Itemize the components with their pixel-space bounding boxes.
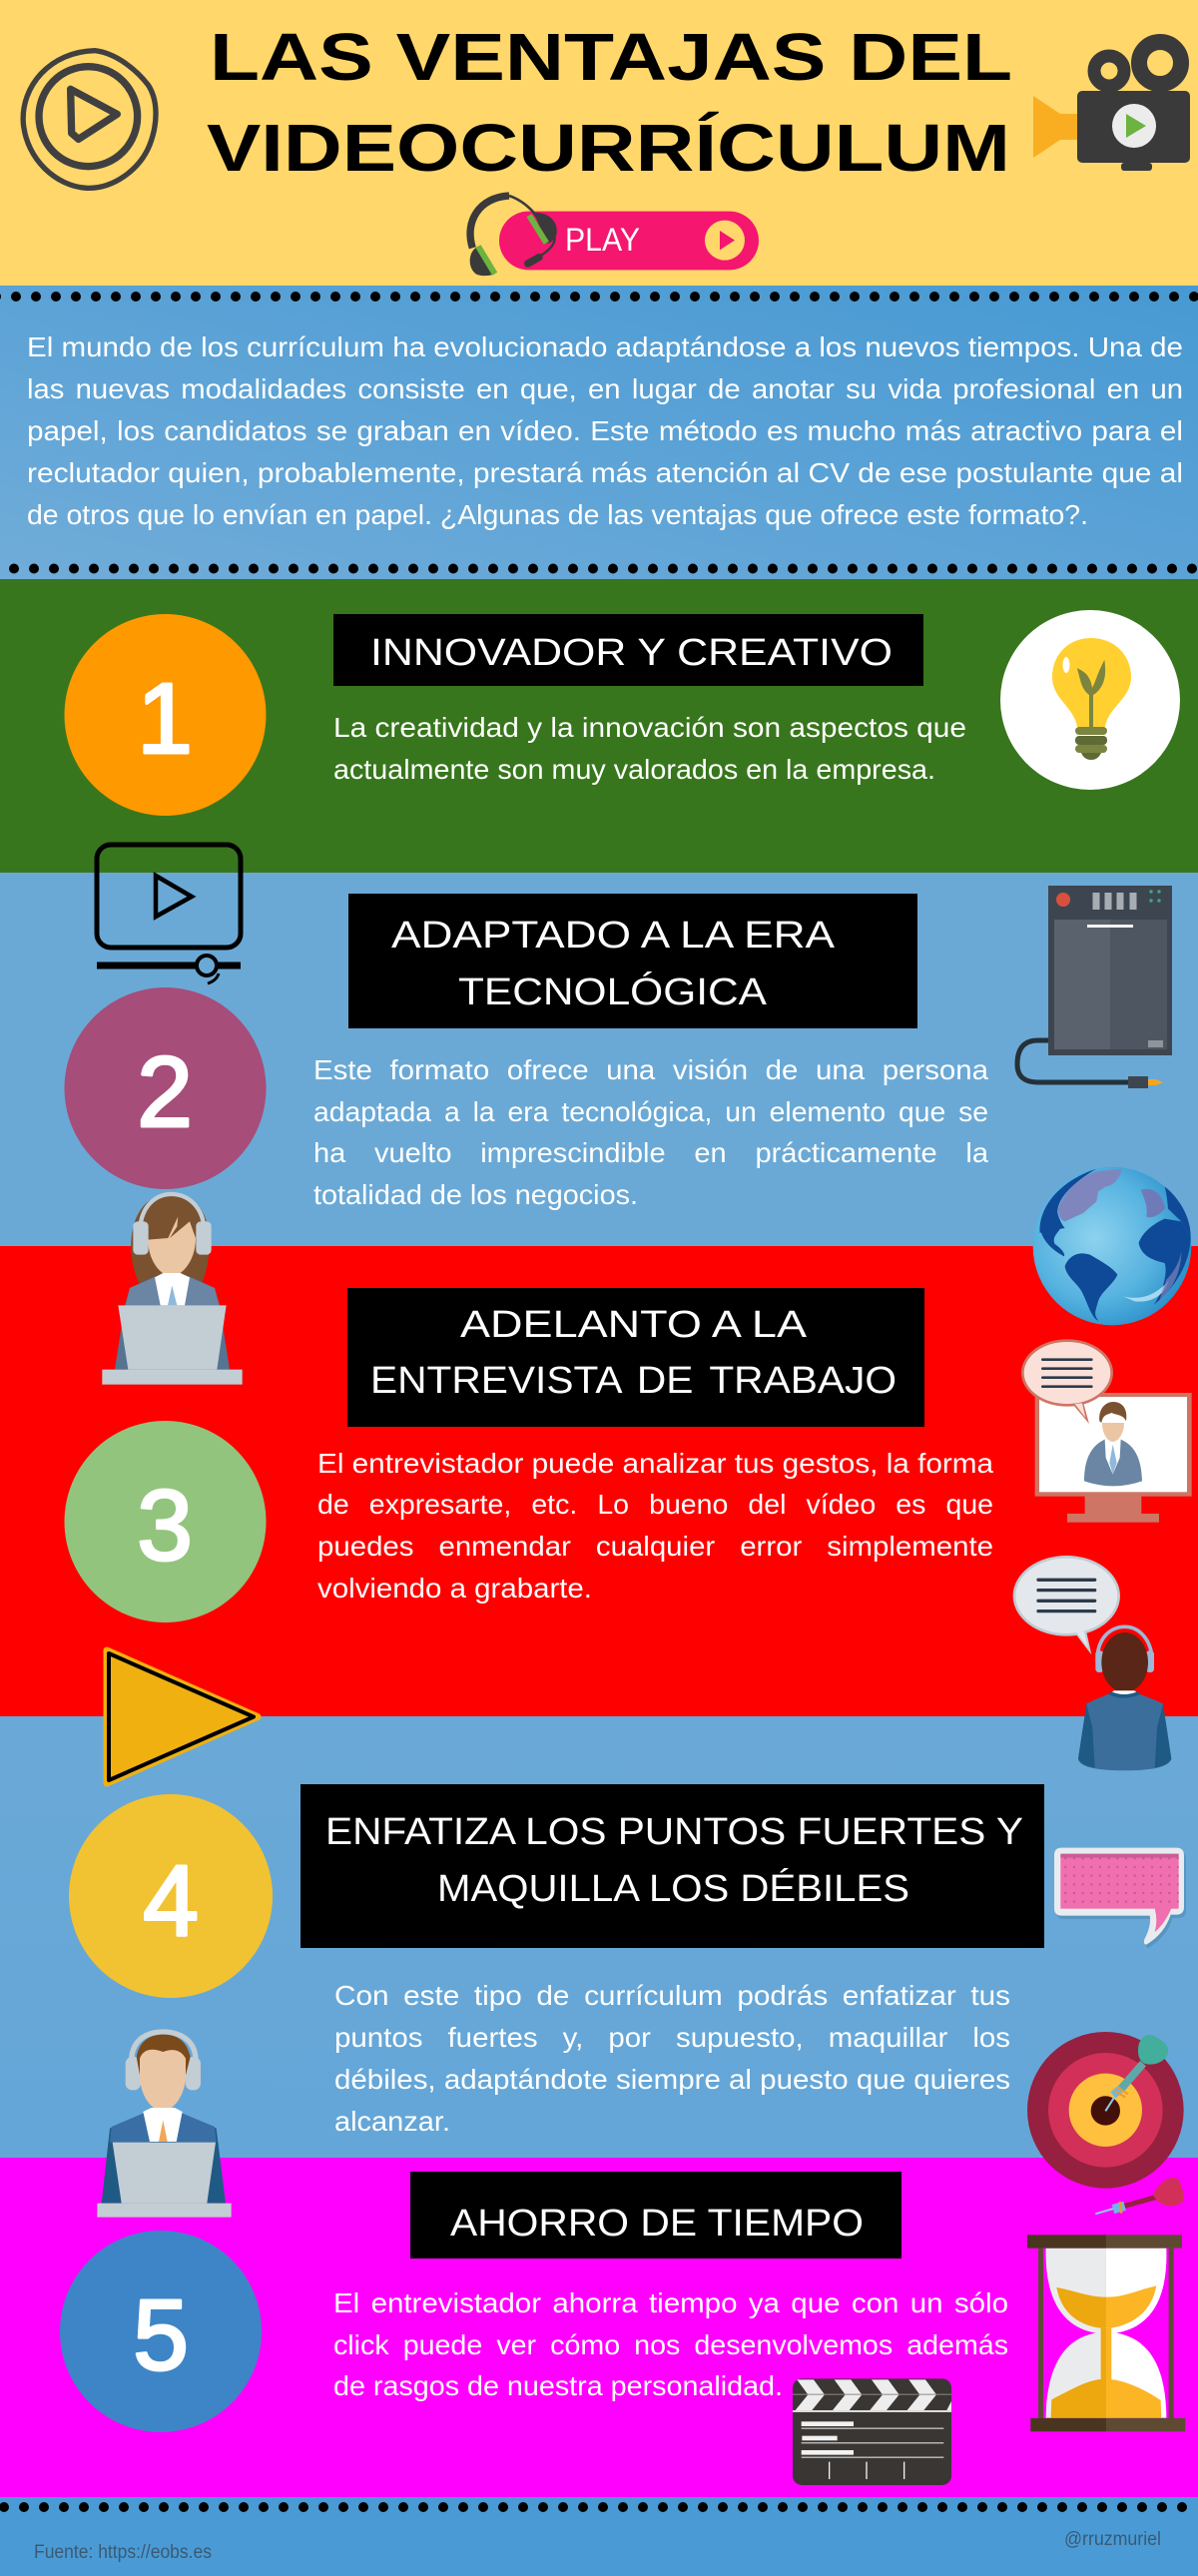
icon: play logo bbox=[23, 51, 156, 188]
icon: interviewer from behind bbox=[1014, 1557, 1171, 1770]
icon: clapperboard bbox=[793, 2378, 951, 2485]
text 3: volviendo a grabarte. bbox=[317, 1573, 592, 1604]
heading 4 bbox=[300, 1784, 1044, 1948]
text 3: de expresarte, etc. Lo bueno del vídeo es que bbox=[317, 1489, 993, 1520]
text 2: adaptada a la era tecnológica, un elemento que se bbox=[313, 1096, 988, 1127]
text 2: totalidad de los negocios. bbox=[313, 1179, 638, 1210]
title: LAS VENTAJAS DEL bbox=[210, 20, 1012, 95]
icon: man with headset bbox=[97, 2032, 232, 2218]
text 5: El entrevistador ahorra tiempo ya que con un sólo bbox=[333, 2287, 1008, 2318]
play button icon bbox=[705, 221, 745, 261]
text 4: Con este tipo de currículum podrás enfatizar tus bbox=[334, 1980, 1010, 2011]
icon: headset bbox=[470, 196, 557, 276]
text 1: actualmente son muy valorados en la empresa. bbox=[333, 754, 935, 785]
icon: hourglass bbox=[1027, 2235, 1185, 2431]
heading 3 bbox=[347, 1288, 924, 1427]
heading 1 bbox=[333, 614, 923, 686]
heading 2 bbox=[348, 894, 917, 1028]
icon: video camera bbox=[1033, 42, 1190, 171]
icon: video player outline bbox=[97, 845, 241, 983]
text 3: puedes enmendar cualquier error simplemente bbox=[317, 1531, 993, 1562]
number 1: 1 bbox=[137, 663, 193, 775]
band: section 4 bbox=[0, 1716, 1198, 2158]
heading 4: MAQUILLA LOS DÉBILES bbox=[437, 1867, 909, 1910]
intro text: de otros que lo envían en papel. ¿Algunas de las ventajas que ofrece este formato?. bbox=[27, 499, 1088, 530]
text 4: débiles, adaptándote siempre al puesto que quieres bbox=[334, 2064, 1010, 2095]
text 2: Este formato ofrece una visión de una persona bbox=[313, 1054, 988, 1085]
icon: target with darts bbox=[1027, 2032, 1184, 2214]
text 2 bbox=[313, 1054, 988, 1210]
panel: section 2 bbox=[64, 894, 988, 1210]
heading 3: ENTREVISTA DE TRABAJO bbox=[370, 1360, 897, 1402]
footer background bbox=[0, 2497, 1198, 2576]
band: section 2 bbox=[0, 873, 1198, 1246]
intro text: reclutador quien, probablemente, prestará más atención al CV de ese postulante que al bbox=[27, 457, 1183, 488]
play label: PLAY bbox=[565, 222, 640, 258]
panel: section 4 bbox=[69, 1784, 1044, 2137]
text 1: La creatividad y la innovación son aspectos que bbox=[333, 712, 966, 743]
icon: amplifier device bbox=[1017, 886, 1172, 1088]
author credit: @rruzmuriel bbox=[1064, 2529, 1161, 2550]
heading 4: ENFATIZA LOS PUNTOS FUERTES Y bbox=[325, 1811, 1023, 1853]
intro text: las nuevas modalidades consiste en que, en lugar de anotar su vida profesional en un bbox=[27, 373, 1183, 404]
number 5: 5 bbox=[133, 2279, 189, 2391]
heading 5: AHORRO DE TIEMPO bbox=[450, 2203, 864, 2245]
text 4: alcanzar. bbox=[334, 2106, 450, 2137]
intro text bbox=[27, 331, 1183, 530]
text 5: click puede ver cómo nos desenvolvemos además bbox=[333, 2329, 1008, 2360]
text 3 bbox=[317, 1448, 993, 1604]
number 4 bbox=[69, 1794, 273, 1998]
heading 2: TECNOLÓGICA bbox=[458, 970, 768, 1013]
intro background bbox=[0, 286, 1198, 579]
band: section 5 bbox=[0, 2158, 1198, 2497]
number 1 bbox=[64, 614, 266, 816]
panel: section 3 bbox=[64, 1288, 993, 1622]
heading 5 bbox=[410, 2172, 901, 2258]
band: section 1 bbox=[0, 579, 1198, 873]
title: VIDEOCURRÍCULUM bbox=[207, 111, 1010, 186]
number 2: 2 bbox=[137, 1036, 193, 1148]
text 4 bbox=[334, 1980, 1010, 2137]
text 5 bbox=[333, 2287, 1008, 2401]
intro text: papel, los candidatos se graban en vídeo. Este método es mucho más atractivo para el bbox=[27, 415, 1183, 446]
title bbox=[207, 20, 1012, 186]
text 4: puntos fuertes y, por supuesto, maquillar los bbox=[334, 2022, 1010, 2053]
number 3: 3 bbox=[137, 1470, 193, 1582]
icon: light bulb bbox=[1000, 610, 1180, 790]
header background bbox=[0, 0, 1198, 286]
text 1 bbox=[333, 712, 966, 785]
intro text: El mundo de los currículum ha evolucionado adaptándose a los nuevos tiempos. Una de bbox=[27, 331, 1183, 362]
panel: section 1 bbox=[64, 614, 966, 816]
icon: yellow play triangle bbox=[107, 1650, 258, 1783]
icon: woman with headset bbox=[102, 1194, 243, 1385]
number 2 bbox=[64, 987, 266, 1189]
heading 3: ADELANTO A LA bbox=[460, 1304, 808, 1346]
text 5: de rasgos de nuestra personalidad. bbox=[333, 2370, 783, 2401]
text 3: El entrevistador puede analizar tus gestos, la forma bbox=[317, 1448, 993, 1479]
number 5 bbox=[60, 2231, 262, 2432]
text 2: ha vuelto imprescindible en prácticamente la bbox=[313, 1137, 988, 1168]
heading 2: ADAPTADO A LA ERA bbox=[391, 915, 836, 957]
heading 1: INNOVADOR Y CREATIVO bbox=[370, 632, 893, 674]
icon: interviewee on monitor bbox=[1022, 1341, 1192, 1523]
icon: pink speech bubble bbox=[1054, 1848, 1186, 1948]
number 3 bbox=[64, 1421, 266, 1622]
band: section 3 bbox=[0, 1246, 1198, 1716]
source credit: Fuente: https://eobs.es bbox=[34, 2542, 212, 2563]
number 4: 4 bbox=[143, 1845, 199, 1957]
play button bbox=[470, 196, 759, 276]
icon: globe bbox=[1033, 1167, 1191, 1325]
panel: section 5 bbox=[60, 2172, 1008, 2432]
